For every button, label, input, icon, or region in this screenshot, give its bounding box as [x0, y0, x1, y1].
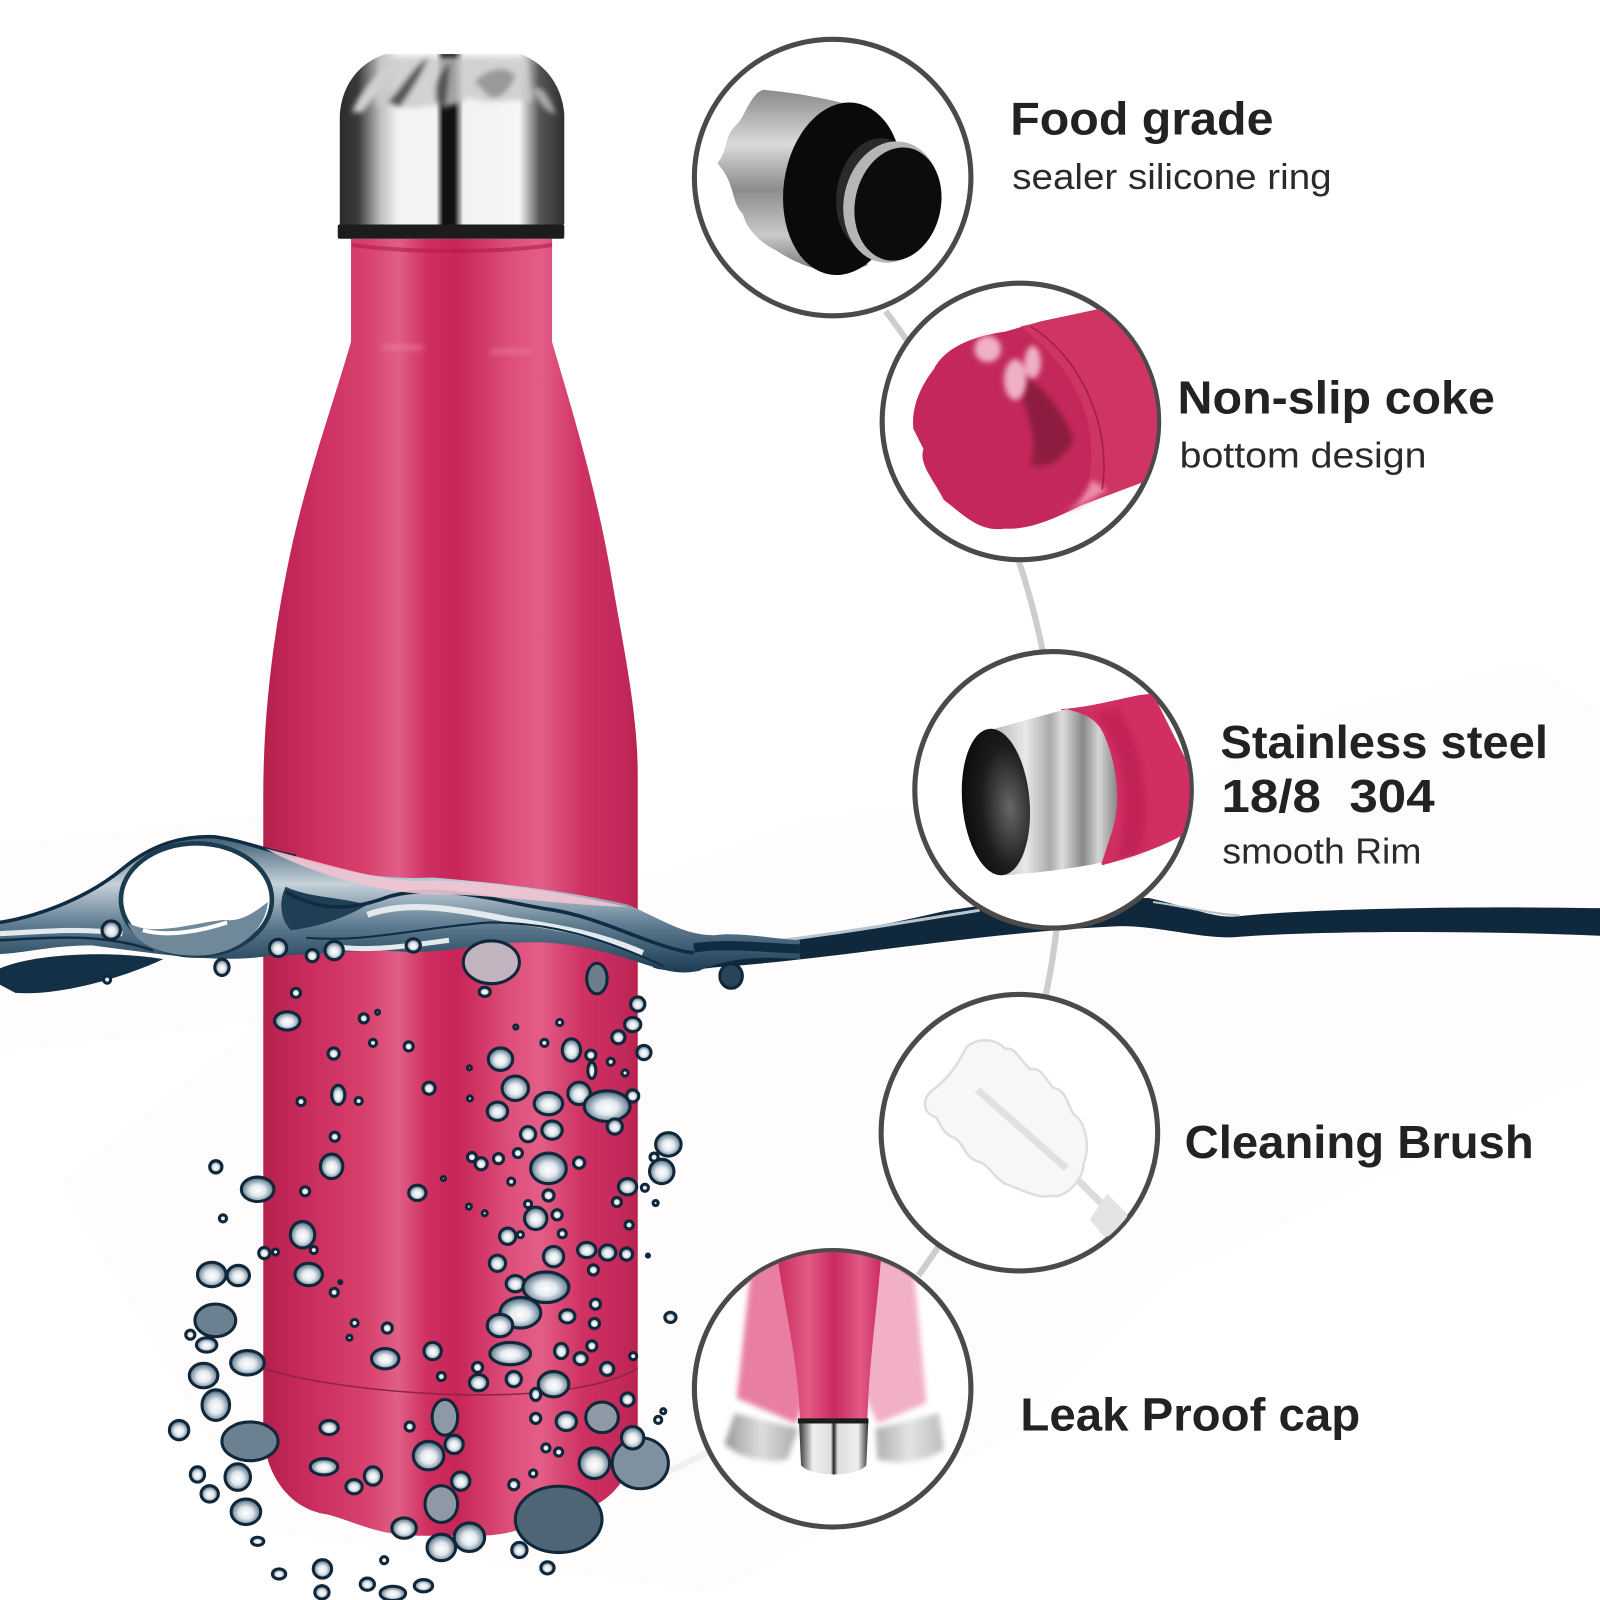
heading: food grade: sealer silicone ring	[1012, 157, 1332, 197]
circle: stainless steel neck	[915, 652, 1199, 928]
silicone ring	[843, 141, 935, 263]
base edge shade	[1020, 306, 1163, 505]
base seam	[1031, 327, 1104, 490]
circle: food grade cap	[694, 39, 971, 316]
water line: right side	[653, 898, 1600, 970]
inner step	[836, 138, 893, 243]
heading: stainless steel: 18/8 304	[1221, 770, 1435, 822]
brush tip	[1090, 1194, 1128, 1237]
heading: leak proof cap: Leak Proof cap	[1020, 1389, 1360, 1441]
cap plug	[854, 148, 942, 261]
base light edge	[1061, 480, 1107, 515]
base seam	[263, 1368, 638, 1395]
wave body	[0, 836, 800, 972]
shoulder highlights	[383, 345, 531, 354]
heading: food grade: Food grade	[1010, 93, 1273, 145]
heading: cleaning brush: Cleaning Brush	[1185, 1116, 1534, 1168]
circle: non-slip bottom	[882, 283, 1163, 560]
wave bubble loop	[121, 843, 272, 956]
bottle	[263, 54, 638, 1536]
neck ridge	[352, 245, 552, 251]
wave light streaks	[0, 907, 643, 953]
centre cap	[799, 1420, 868, 1474]
heading: non-slip coke: Non-slip coke	[1178, 371, 1495, 423]
steel cap	[340, 54, 564, 224]
sponge centre rod	[978, 1090, 1066, 1168]
bottle body	[263, 239, 638, 1536]
heading: non-slip coke: bottom design	[1180, 435, 1427, 475]
water surface and bubbles	[0, 836, 800, 1600]
heading: food grade	[1010, 93, 1332, 197]
cap dome petals	[352, 57, 556, 114]
pink bottle section	[1061, 694, 1199, 865]
circle: cleaning brush	[881, 994, 1158, 1271]
pink base shape	[913, 306, 1163, 529]
heading: non-slip coke	[1178, 371, 1495, 475]
steel neck	[995, 709, 1117, 876]
heading: stainless steel: smooth Rim	[1222, 831, 1421, 871]
left blurred bottle	[722, 1255, 804, 1464]
cap band	[338, 224, 564, 239]
left dark band	[0, 954, 163, 993]
wave streaks	[0, 837, 800, 966]
faint background wash	[0, 663, 1600, 1592]
bubbles	[102, 921, 742, 1600]
brush stick	[1077, 1178, 1103, 1206]
steel cap body	[717, 90, 878, 271]
black rim	[783, 102, 896, 275]
heading: stainless steel: Stainless steel	[1220, 716, 1548, 768]
pink shadow band	[1097, 709, 1146, 859]
circle: leak proof cap	[694, 1250, 971, 1527]
wave dark mass	[281, 887, 367, 930]
connector arc	[663, 311, 1061, 1474]
heading: stainless steel	[1220, 716, 1548, 871]
base dent	[1020, 376, 1076, 468]
bottle opening	[962, 728, 1030, 876]
centre bottle	[777, 1250, 882, 1420]
sponge	[925, 1040, 1087, 1196]
pink reflection on wave	[265, 848, 628, 907]
base highlights	[974, 336, 1041, 400]
right blurred bottle	[868, 1258, 946, 1464]
